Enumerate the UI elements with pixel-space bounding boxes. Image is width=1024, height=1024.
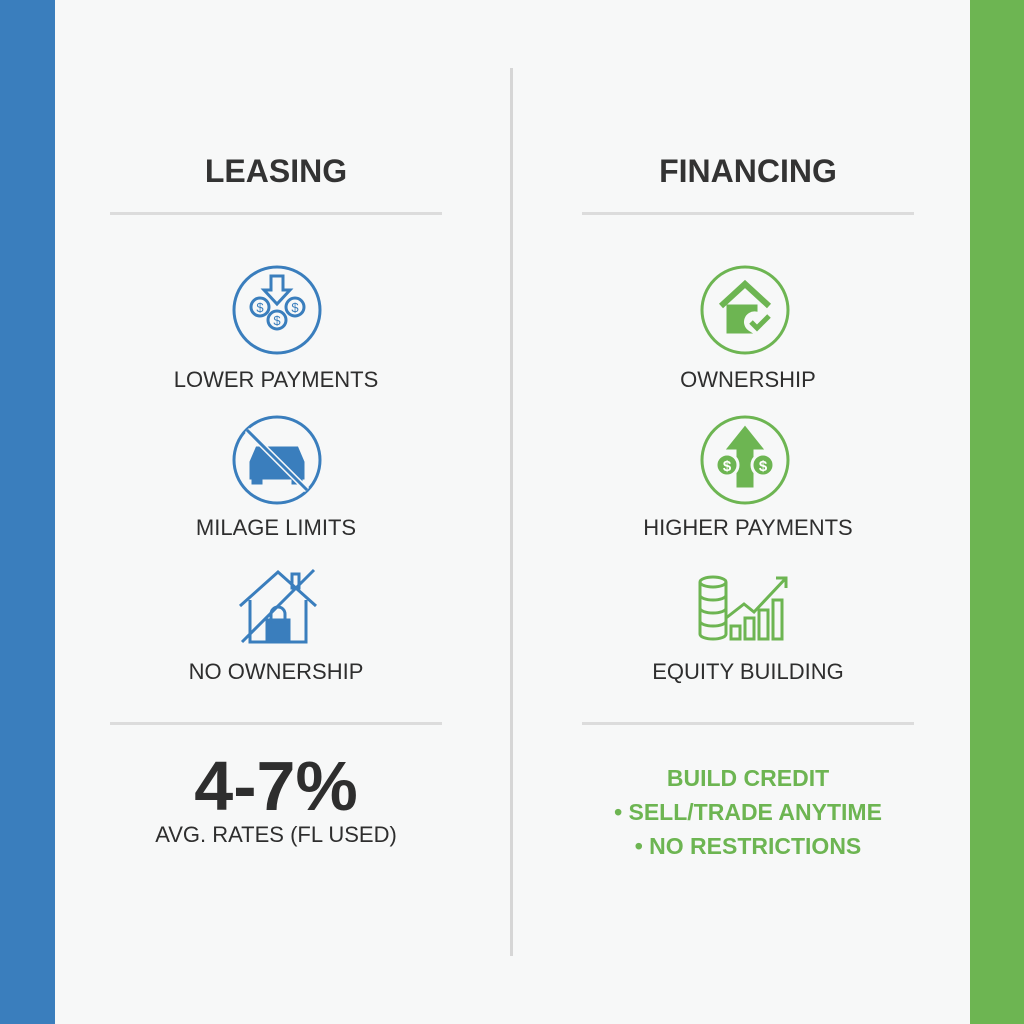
label: equity building: EQUITY BUILDING (652, 659, 844, 684)
icon: no ownership (239, 569, 317, 644)
icon: mileage limits (232, 416, 322, 504)
text: AVG. RATES (FL USED) (155, 822, 397, 847)
heading: financing: FINANCING (659, 153, 837, 189)
label: ownership: OWNERSHIP (680, 367, 816, 392)
list: financing benefits: BUILD CREDIT (667, 765, 829, 791)
list: financing benefits: • SELL/TRADE ANYTIME (614, 799, 882, 825)
list: financing benefits (614, 765, 882, 859)
icon: lower payments: $ (273, 313, 281, 328)
icon: ownership (700, 266, 790, 354)
right green bar (970, 0, 1024, 1024)
icon: higher payments: $ (759, 458, 768, 475)
icon: lower payments: $ (256, 300, 264, 315)
left blue bar (0, 0, 55, 1024)
label: higher payments: HIGHER PAYMENTS (643, 515, 853, 540)
heading: leasing: LEASING (205, 153, 347, 189)
icon: equity building (698, 576, 788, 640)
icon: lower payments: $ (291, 300, 299, 315)
icon: lower payments (232, 266, 322, 354)
label: no ownership: NO OWNERSHIP (189, 659, 363, 684)
label: lower payments: LOWER PAYMENTS (174, 367, 378, 392)
icon: higher payments: $ (723, 458, 732, 475)
icon: higher payments (700, 416, 790, 504)
stat: rates: 4-7% (194, 747, 358, 825)
list: financing benefits: • NO RESTRICTIONS (635, 833, 861, 859)
label: mileage limits: MILAGE LIMITS (196, 515, 356, 540)
